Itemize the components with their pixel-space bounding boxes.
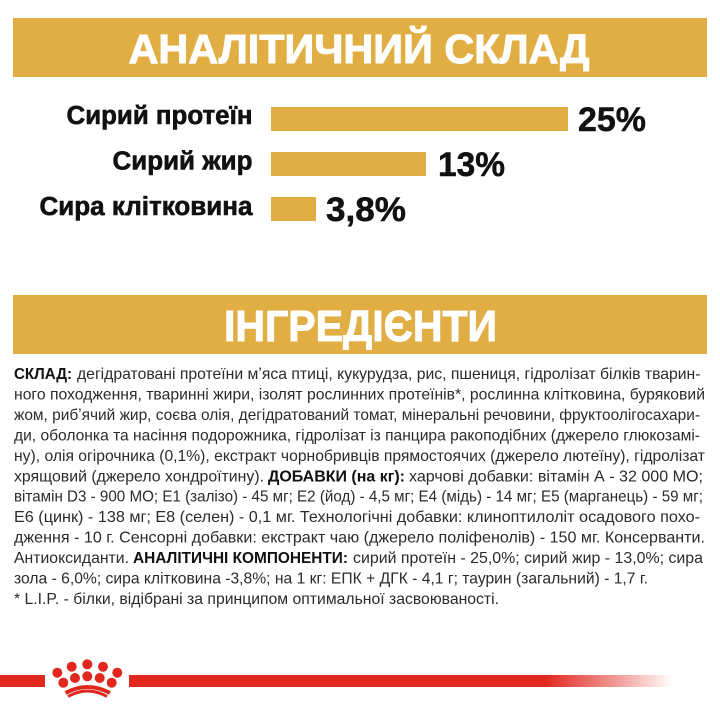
text block: ingredients list: АНАЛІТИЧНІ КОМПОНЕНТИ: (133, 550, 348, 567)
panel: ingredients header (13, 295, 707, 354)
text block: ingredients list: ДОБАВКИ (на кг): (268, 468, 405, 485)
text block: ingredients list: ди, оболонка та насіння подорожника, гідролізат із панцира ракоподібних (джерело глюкозамі- (14, 427, 700, 444)
text block: ingredients list: дегідратовані протеїни мʼяса птиці, кукурудза, рис, пшениця, гідролізат білків тварин- (77, 366, 700, 383)
text block: ingredients list: ну), олія огірочника (0,1%), екстракт чорнобривців прямостоячих (джерело лютеїну), гідролізат (14, 448, 706, 465)
panel: analytical composition header (13, 18, 707, 77)
text block: ingredients list: хрящовий (джерело хондроїтину). (14, 468, 264, 485)
bar row: crude fat (112, 146, 505, 184)
text block: ingredients list: * L.I.P. - білки, відібрані за принципом оптимальної засвоюваності. (14, 591, 499, 608)
text block: ingredients list: жом, рибʼячий жир, соєва олія, дегідратований томат, мінеральні речовини, фруктоолігосахари- (14, 407, 700, 424)
bar row: crude fibre (40, 191, 406, 229)
text block: ingredients list: Антиоксиданти. (14, 550, 129, 567)
bar row: crude fibre: 3,8% (326, 191, 406, 229)
bar row: crude protein: Сирий протеїн (66, 102, 253, 130)
footer: red brand line (0, 675, 673, 687)
text block: ingredients list: вітамін D3 - 900 МО; Е1 (залізо) - 45 мг; Е2 (йод) - 4,5 мг; Е4 (мідь) - 14 мг; Е5 (марганець) - 59 мг; (14, 489, 703, 506)
icon: crown logo (52, 659, 122, 696)
bar row: crude protein (66, 101, 646, 139)
text block: ingredients list: зола - 6,0%; сира клітковина -3,8%; на 1 кг: ЕПК + ДГК - 4,1 г; таурин (загальний) - 1,7 г. (14, 570, 648, 588)
text block: ingredients list (14, 366, 706, 608)
panel: analytical composition header: АНАЛІТИЧНИЙ СКЛАД (128, 26, 590, 72)
bar row: crude fibre: Сира клітковина (40, 193, 253, 221)
text block: ingredients list: сирий протеїн - 25,0%; сирий жир - 13,0%; сира (353, 550, 703, 567)
text block: ingredients list: Е6 (цинк) - 138 мг; Е8 (селен) - 0,1 мг. Технологічні добавки: клиноптилоліт осадового похо- (14, 509, 700, 526)
text block: ingredients list: ного походження, тваринні жири, ізолят рослинних протеїнів*, рослинна клітковина, буряковий (14, 386, 705, 404)
bar row: crude fat: 13% (438, 146, 505, 184)
bar row: crude protein: 25% (578, 101, 646, 139)
bar chart: analytical composition (40, 101, 646, 229)
text block: ingredients list: СКЛАД: (14, 366, 72, 383)
panel: ingredients header: ІНГРЕДІЄНТИ (224, 302, 497, 351)
text block: ingredients list: харчові добавки: вітамін А - 32 000 МО; (409, 468, 703, 485)
bar row: crude fat: Сирий жир (112, 148, 252, 176)
text block: ingredients list: дження - 10 г. Сенсорні добавки: екстракт чаю (джерело поліфенолів) - 150 мг. Консерванти. (14, 530, 705, 547)
